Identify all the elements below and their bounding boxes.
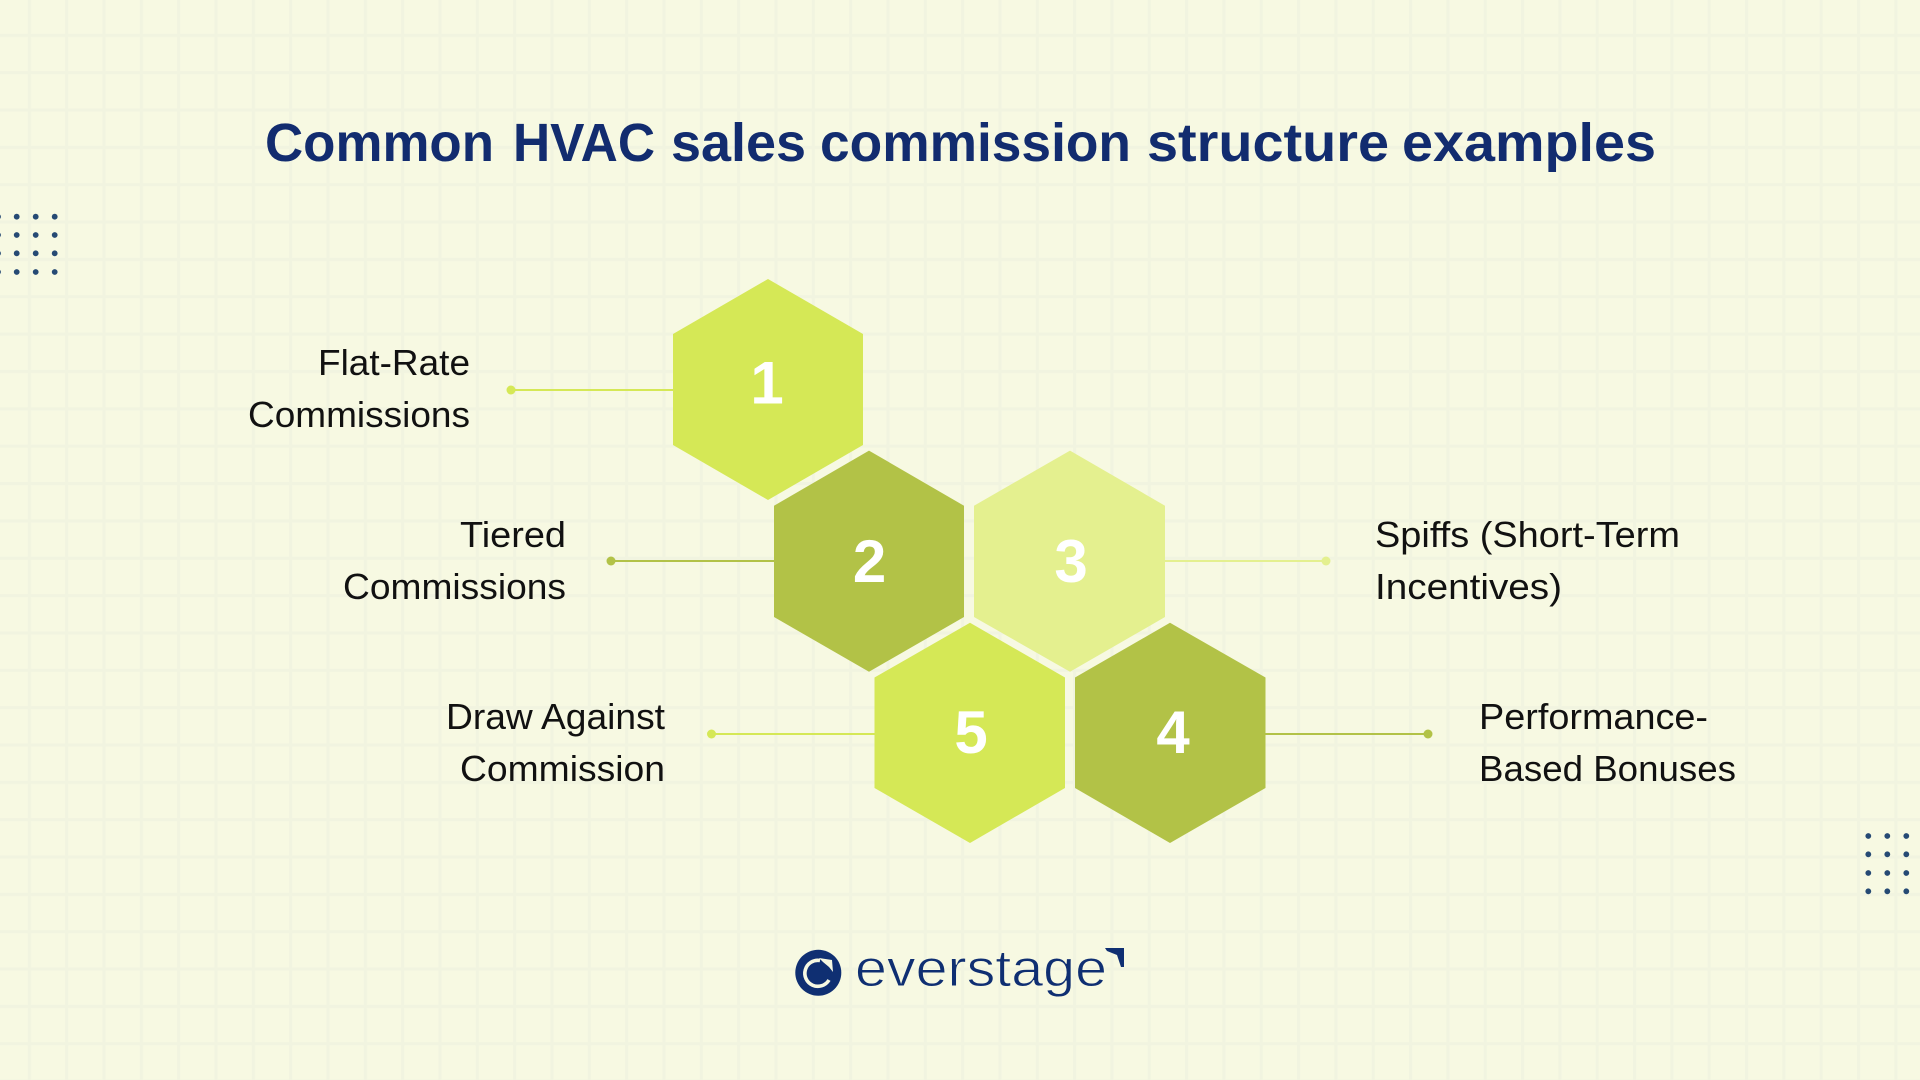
label: tiered commissions xyxy=(343,514,566,607)
title: sales xyxy=(671,113,806,173)
label: draw against commission: Commission xyxy=(460,748,665,789)
hexagon 4 xyxy=(1075,623,1266,843)
title xyxy=(265,113,1656,173)
hexagon 5 xyxy=(874,623,1065,843)
dot grid: top left xyxy=(0,214,58,275)
connector 4 xyxy=(1265,730,1432,738)
hexagon 4: 4 xyxy=(1156,699,1190,766)
hexagon 3: 3 xyxy=(1054,528,1088,595)
label: performance-based bonuses xyxy=(1479,696,1736,789)
title: commission xyxy=(820,113,1131,173)
label: flat-rate commissions: Commissions xyxy=(248,394,470,435)
label: draw against commission: Draw Against xyxy=(446,696,665,737)
title: structure xyxy=(1147,113,1389,173)
logo: everstage: everstage xyxy=(855,940,1107,998)
label: tiered commissions: Commissions xyxy=(343,566,566,607)
hexagon 1 xyxy=(673,279,863,500)
label: spiffs: Spiffs (Short-Term xyxy=(1375,514,1680,555)
hexagon 1: 1 xyxy=(750,350,784,416)
hexagon 3 xyxy=(974,451,1165,672)
hexagon 2 xyxy=(774,451,964,672)
connector 2 xyxy=(606,556,774,566)
title: examples xyxy=(1402,113,1656,173)
connector 1 xyxy=(506,386,673,394)
hexagon 5: 5 xyxy=(954,699,988,766)
label: flat-rate commissions: Flat-Rate xyxy=(318,342,470,383)
label: tiered commissions: Tiered xyxy=(460,514,566,555)
label: spiffs: Incentives) xyxy=(1375,566,1562,607)
dot grid: bottom right xyxy=(1865,833,1909,894)
logo: everstage xyxy=(795,940,1124,998)
label: performance-based bonuses: Based Bonuses xyxy=(1479,748,1736,789)
hexagon 2: 2 xyxy=(853,528,886,595)
label: flat-rate commissions xyxy=(248,342,470,435)
connector 3 xyxy=(1165,556,1330,566)
connector 5 xyxy=(707,730,875,738)
label: performance-based bonuses: Performance- xyxy=(1479,696,1708,737)
title: HVAC xyxy=(513,113,655,173)
label: spiffs xyxy=(1375,514,1680,607)
label: draw against commission xyxy=(446,696,665,789)
title: Common xyxy=(265,113,494,173)
